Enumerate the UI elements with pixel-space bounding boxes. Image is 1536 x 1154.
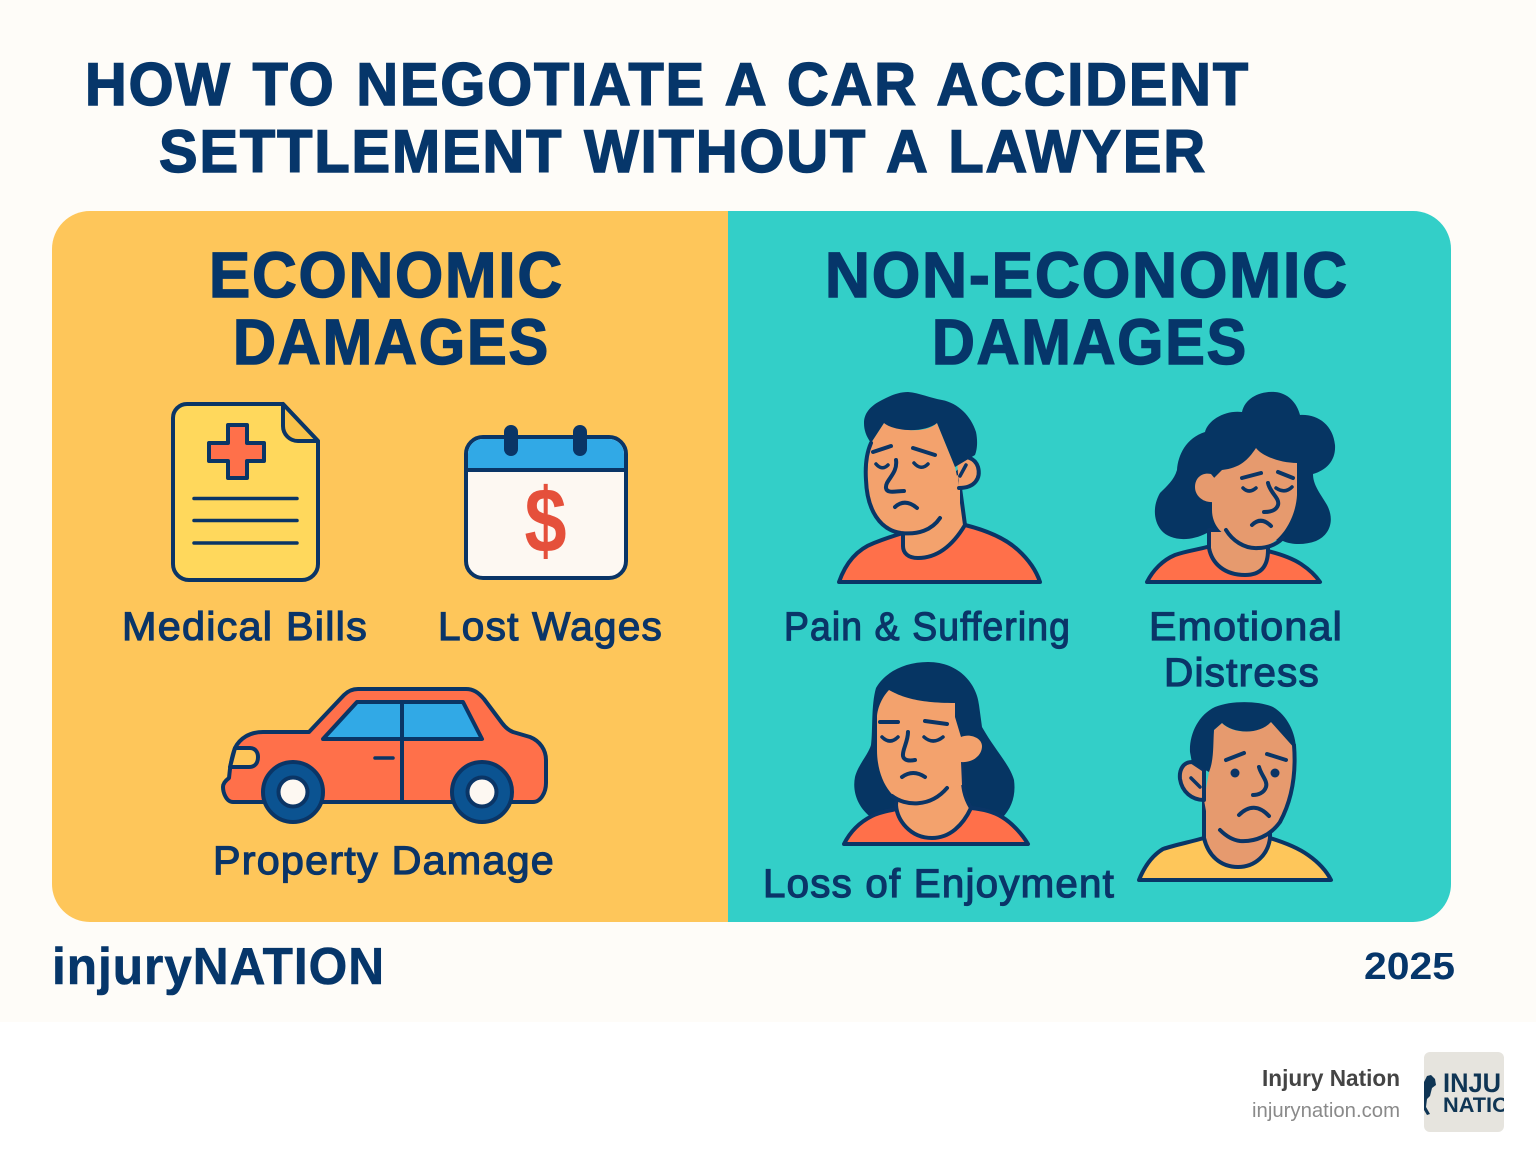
label: emotional distress [1149,605,1343,695]
footer logo [1424,1052,1509,1132]
label: emotional distress: Emotional [1149,605,1343,649]
heading: economic damages: ECONOMIC [209,239,564,311]
heading: economic damages: DAMAGES [233,306,550,378]
label: property damage: Property Damage [213,839,555,883]
icon: medical bill document [173,404,318,580]
heading: economic damages [209,239,564,378]
icon: car [223,689,546,822]
heading: non-economic damages [825,239,1349,378]
icon: calendar with dollar sign [466,425,626,578]
footer logo: INJU [1443,1068,1501,1098]
label: emotional distress: Distress [1164,651,1320,695]
title [85,51,1250,185]
title: SETTLEMENT WITHOUT A LAWYER [159,118,1207,185]
icon: calendar with dollar sign: $ [524,469,567,572]
label: lost wages: Lost Wages [438,605,663,649]
icon: sad woman, emotional distress [1147,392,1335,582]
heading: non-economic damages: DAMAGES [932,306,1248,378]
footer attribution: injurynation.com [1252,1100,1400,1122]
title: HOW TO NEGOTIATE A CAR ACCIDENT [85,51,1250,118]
footer logo: NATIO [1443,1094,1509,1117]
year: 2025 [1364,946,1455,988]
icon: sad woman, loss of enjoyment [844,662,1028,844]
footer attribution: Injury Nation [1262,1065,1400,1091]
footer attribution [1252,1065,1400,1122]
label: medical bills: Medical Bills [122,605,368,649]
brand wordmark: injuryNATION [52,938,385,996]
label: pain and suffering: Pain & Suffering [784,605,1071,649]
icon: sad man, pain and suffering [839,392,1040,582]
heading: non-economic damages: NON-ECONOMIC [825,239,1349,311]
panel: economic damages [52,211,728,922]
label: loss of enjoyment: Loss of Enjoyment [763,862,1115,906]
icon: sad man, worried [1139,702,1331,880]
panel: non-economic damages [728,211,1451,922]
